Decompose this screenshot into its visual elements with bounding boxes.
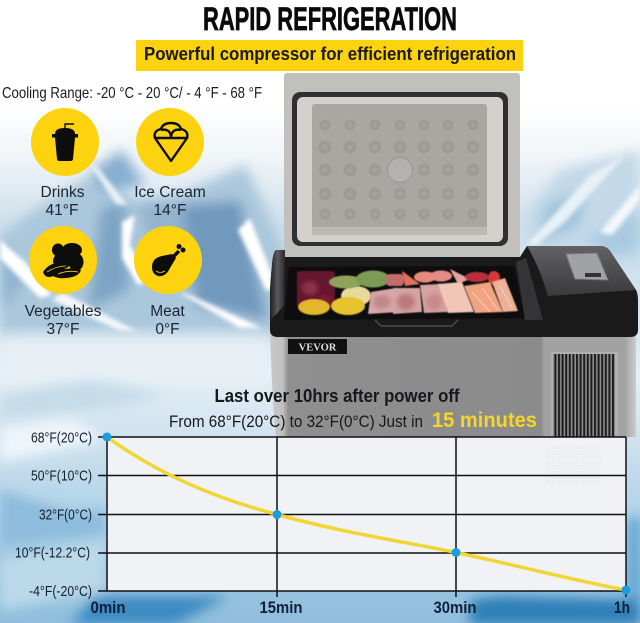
item: ice cream: Ice Cream [134, 184, 206, 201]
item: ice cream [134, 108, 206, 219]
y axis labels: -4°F(-20°C) [29, 584, 92, 600]
x axis labels: 30min [434, 598, 476, 617]
item: ice cream: 14°F [154, 202, 186, 219]
heading: power off: Last over 10hrs after power off [214, 386, 460, 406]
caption: cooling time [169, 409, 537, 432]
plot area [107, 437, 626, 591]
control panel [566, 253, 608, 280]
cooler [270, 73, 638, 437]
lid dimples [318, 119, 480, 220]
inner tray with food [284, 258, 543, 326]
icon: vegetables [43, 243, 84, 278]
item: meat: Meat [150, 303, 185, 320]
icon: ice cream cone [155, 123, 187, 161]
vent grille [551, 352, 618, 437]
black upper shell [270, 246, 638, 337]
y axis labels [15, 430, 92, 600]
item: drinks: Drinks [41, 184, 85, 201]
y axis labels: 10°F(-12.2°C) [15, 546, 90, 562]
caption: cooling time: 15 minutes [432, 409, 537, 432]
y axis labels: 68°F(20°C) [31, 430, 92, 446]
caption: cooling time: From 68°F(20°C) to 32°F(0°C) Just in [169, 412, 423, 431]
x axis labels: 15min [260, 598, 302, 617]
grey lower body [270, 330, 636, 437]
cooling curve [107, 437, 626, 590]
item: drinks: 41°F [46, 202, 78, 219]
logo: VEVOR [288, 339, 347, 354]
y axis labels: 32°F(0°C) [39, 508, 92, 524]
item: vegetables: Vegetables [25, 303, 102, 320]
item: drinks [31, 108, 99, 219]
x axis labels [90, 598, 630, 617]
icon: drumstick [152, 244, 186, 276]
item: vegetables [25, 226, 102, 338]
data points [102, 432, 630, 594]
logo: VEVOR: VEVOR [299, 342, 337, 354]
y axis labels: 50°F(10°C) [31, 468, 92, 484]
title: RAPID REFRIGERATION [203, 1, 457, 37]
item: meat: 0°F [155, 321, 180, 338]
subtitle banner [136, 40, 523, 71]
subtitle banner: Powerful compressor for efficient refrigeration [144, 44, 516, 64]
icon: cup [52, 124, 78, 161]
x axis labels: 1h [614, 598, 630, 617]
item: meat [134, 226, 202, 338]
cooling range text: Cooling Range: -20 °C - 20 °C/ - 4 °F - 68 °F [2, 85, 262, 102]
x axis labels: 0min [90, 598, 126, 617]
chart: temperature over time [15, 430, 630, 617]
open lid [284, 73, 520, 263]
item: vegetables: 37°F [47, 321, 79, 338]
